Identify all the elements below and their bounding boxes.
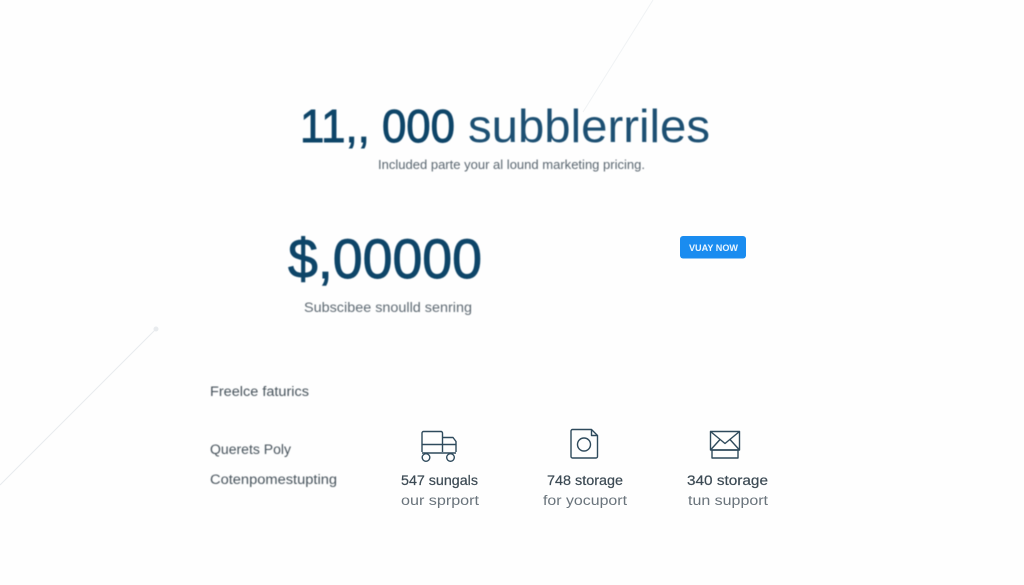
- caption: tun support: tun support: [688, 493, 768, 508]
- stat: 748 storage: 748 storage: [547, 473, 623, 488]
- button: buy now: [680, 236, 746, 258]
- title: 11,, 000: [300, 100, 455, 152]
- icon: truck: [422, 432, 456, 461]
- title: [300, 100, 710, 152]
- caption: our sprport: our sprport: [401, 493, 479, 508]
- decorative diagonal line: upper: [583, 0, 653, 112]
- features heading: Freelce faturics: [210, 384, 309, 399]
- caption: for yocuport: for yocuport: [543, 493, 627, 508]
- decorative diagonal line with dot: left: [0, 326, 158, 485]
- feature label: querets poly: Querets Poly: [210, 442, 291, 457]
- price: $,00000: [288, 227, 482, 290]
- title: subblerriles: [468, 100, 710, 152]
- feature column: 748 storage: [543, 430, 627, 508]
- stat: 340 storage: 340 storage: [687, 473, 768, 488]
- button: buy now: VUAY NOW: [689, 243, 738, 254]
- icon: envelope: [710, 432, 740, 458]
- feature label: cotenpomestupting: Cotenpomestupting: [210, 472, 337, 487]
- price caption: Subscibee snoulld senring: [304, 299, 472, 315]
- feature column: sungals: [401, 432, 479, 508]
- stat: 547 sungals: 547 sungals: [401, 473, 478, 488]
- icon: document: [571, 430, 598, 458]
- subtitle: Included parte your al lound marketing pricing.: [378, 157, 645, 172]
- feature column: 340 storage: [687, 432, 768, 508]
